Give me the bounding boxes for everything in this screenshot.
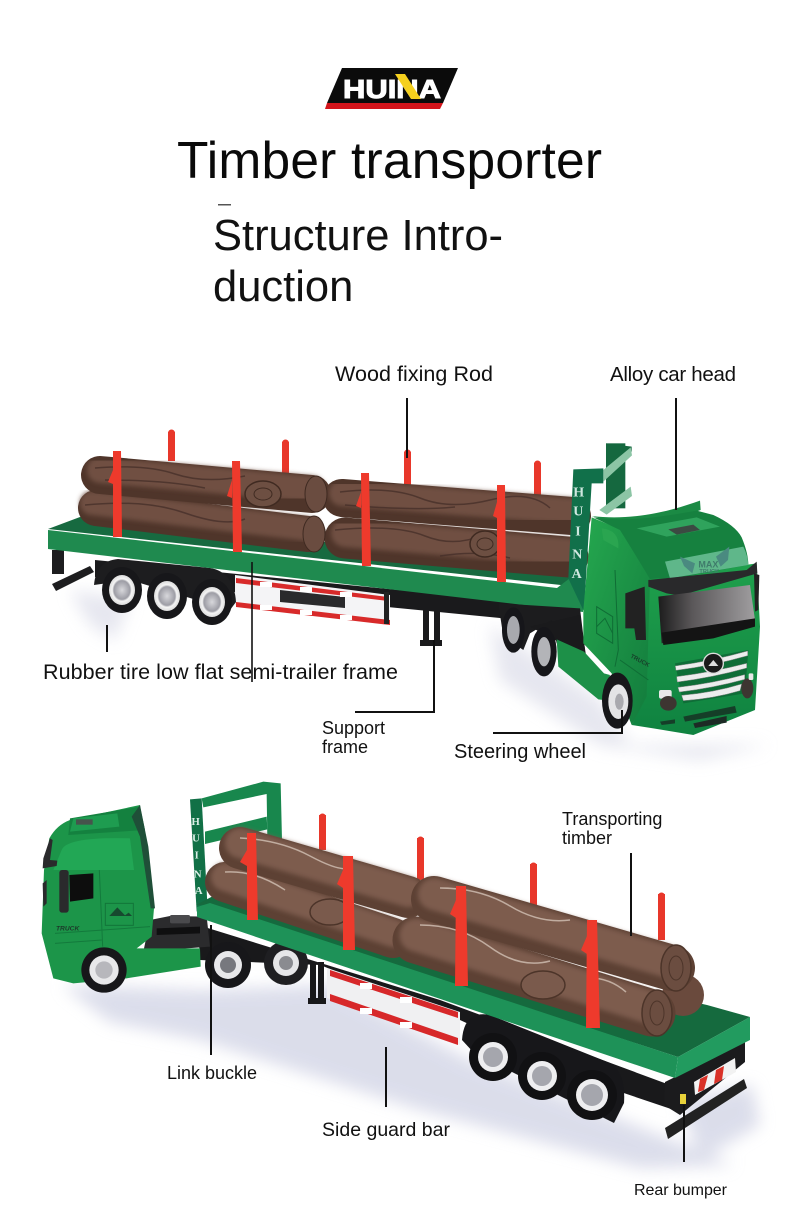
deck top bbox=[48, 517, 580, 586]
lower truck illustration bbox=[62, 925, 760, 1168]
callout labels bbox=[43, 362, 736, 1199]
truck lettering: TRUCK bbox=[56, 925, 80, 932]
callout labels: Alloy car head bbox=[610, 363, 736, 386]
headlights and bumper bbox=[659, 673, 753, 728]
rear bumper bbox=[52, 550, 94, 591]
deck rear face bbox=[675, 1017, 750, 1078]
side guard bar bbox=[235, 575, 390, 625]
headboard frame: U bbox=[573, 504, 583, 519]
upper truck illustration bbox=[48, 430, 770, 760]
callout labels: Rubber tire low flat semi-trailer frame bbox=[43, 660, 398, 684]
upper tractor cab: TRUCK bbox=[629, 654, 651, 669]
headboard frame bbox=[568, 443, 632, 612]
callout lines bbox=[107, 398, 684, 1162]
door logo bbox=[105, 903, 133, 925]
headboard frame: H bbox=[192, 817, 201, 828]
callout labels: Transporting bbox=[562, 809, 662, 829]
headboard frame: N bbox=[194, 869, 202, 880]
ground shadow bbox=[62, 985, 760, 1168]
chassis behind cab bbox=[143, 915, 210, 952]
chassis bbox=[95, 560, 580, 640]
callout labels: Support bbox=[322, 718, 385, 738]
title: Timber transporter bbox=[177, 131, 602, 189]
side mirror bbox=[59, 870, 69, 913]
deck top bbox=[196, 895, 750, 1057]
visor badge: MAX bbox=[698, 560, 718, 570]
door window bbox=[69, 873, 93, 902]
lower tractor cab bbox=[42, 782, 282, 993]
callout labels: frame bbox=[322, 737, 368, 757]
small dash bbox=[218, 204, 231, 206]
support leg bbox=[308, 962, 326, 1004]
chassis bbox=[198, 925, 680, 1112]
cab body bbox=[42, 805, 201, 983]
headboard frame: N bbox=[572, 548, 582, 563]
back stakes bbox=[319, 814, 665, 940]
headboard frame: I bbox=[575, 524, 581, 539]
grille bbox=[675, 650, 748, 703]
subtitle: duction bbox=[213, 263, 353, 311]
steering wheel bbox=[602, 673, 633, 729]
rear bumper and lights bbox=[664, 1042, 747, 1139]
trailer wheels bbox=[94, 559, 236, 625]
logs bbox=[85, 467, 572, 558]
deck front face bbox=[48, 530, 583, 612]
ground shadow bbox=[70, 590, 770, 760]
front wheel bbox=[81, 947, 127, 993]
logs bbox=[225, 838, 704, 1036]
tractor chassis and rear wheels bbox=[498, 603, 587, 676]
headboard frame: A bbox=[572, 567, 582, 582]
logo: HUINA: HUINA bbox=[343, 74, 441, 104]
callout labels: Wood fixing Rod bbox=[335, 362, 493, 386]
deck side face bbox=[197, 903, 678, 1078]
rear axle wheels bbox=[462, 1014, 624, 1123]
upper tractor cab bbox=[498, 443, 760, 735]
callout labels: timber bbox=[562, 828, 612, 848]
headboard frame: H bbox=[573, 486, 584, 501]
headboard frame: I bbox=[195, 850, 199, 861]
logo: HUINA bbox=[325, 68, 458, 109]
lower trailer deck and timber load bbox=[196, 814, 750, 1078]
callout labels: Steering wheel bbox=[454, 741, 586, 763]
support frame bbox=[420, 600, 442, 646]
headboard frame: A bbox=[195, 886, 203, 897]
visor badge: TRUCK bbox=[699, 569, 720, 575]
front stakes bbox=[108, 451, 506, 582]
tractor rear wheels bbox=[205, 941, 308, 988]
headboard frame bbox=[190, 782, 282, 912]
door details bbox=[597, 570, 648, 680]
cab body bbox=[557, 639, 610, 700]
front stakes bbox=[240, 833, 600, 1028]
side mirror bbox=[625, 587, 646, 640]
callout labels: Link buckle bbox=[167, 1063, 257, 1083]
back stakes bbox=[168, 430, 541, 497]
callout labels: Rear bumper bbox=[634, 1182, 728, 1199]
subtitle: Structure Intro- bbox=[213, 212, 503, 260]
headboard frame: U bbox=[192, 834, 200, 845]
visor badge bbox=[665, 547, 748, 578]
side guard bar bbox=[327, 968, 460, 1045]
callout labels: Side guard bar bbox=[322, 1119, 450, 1141]
